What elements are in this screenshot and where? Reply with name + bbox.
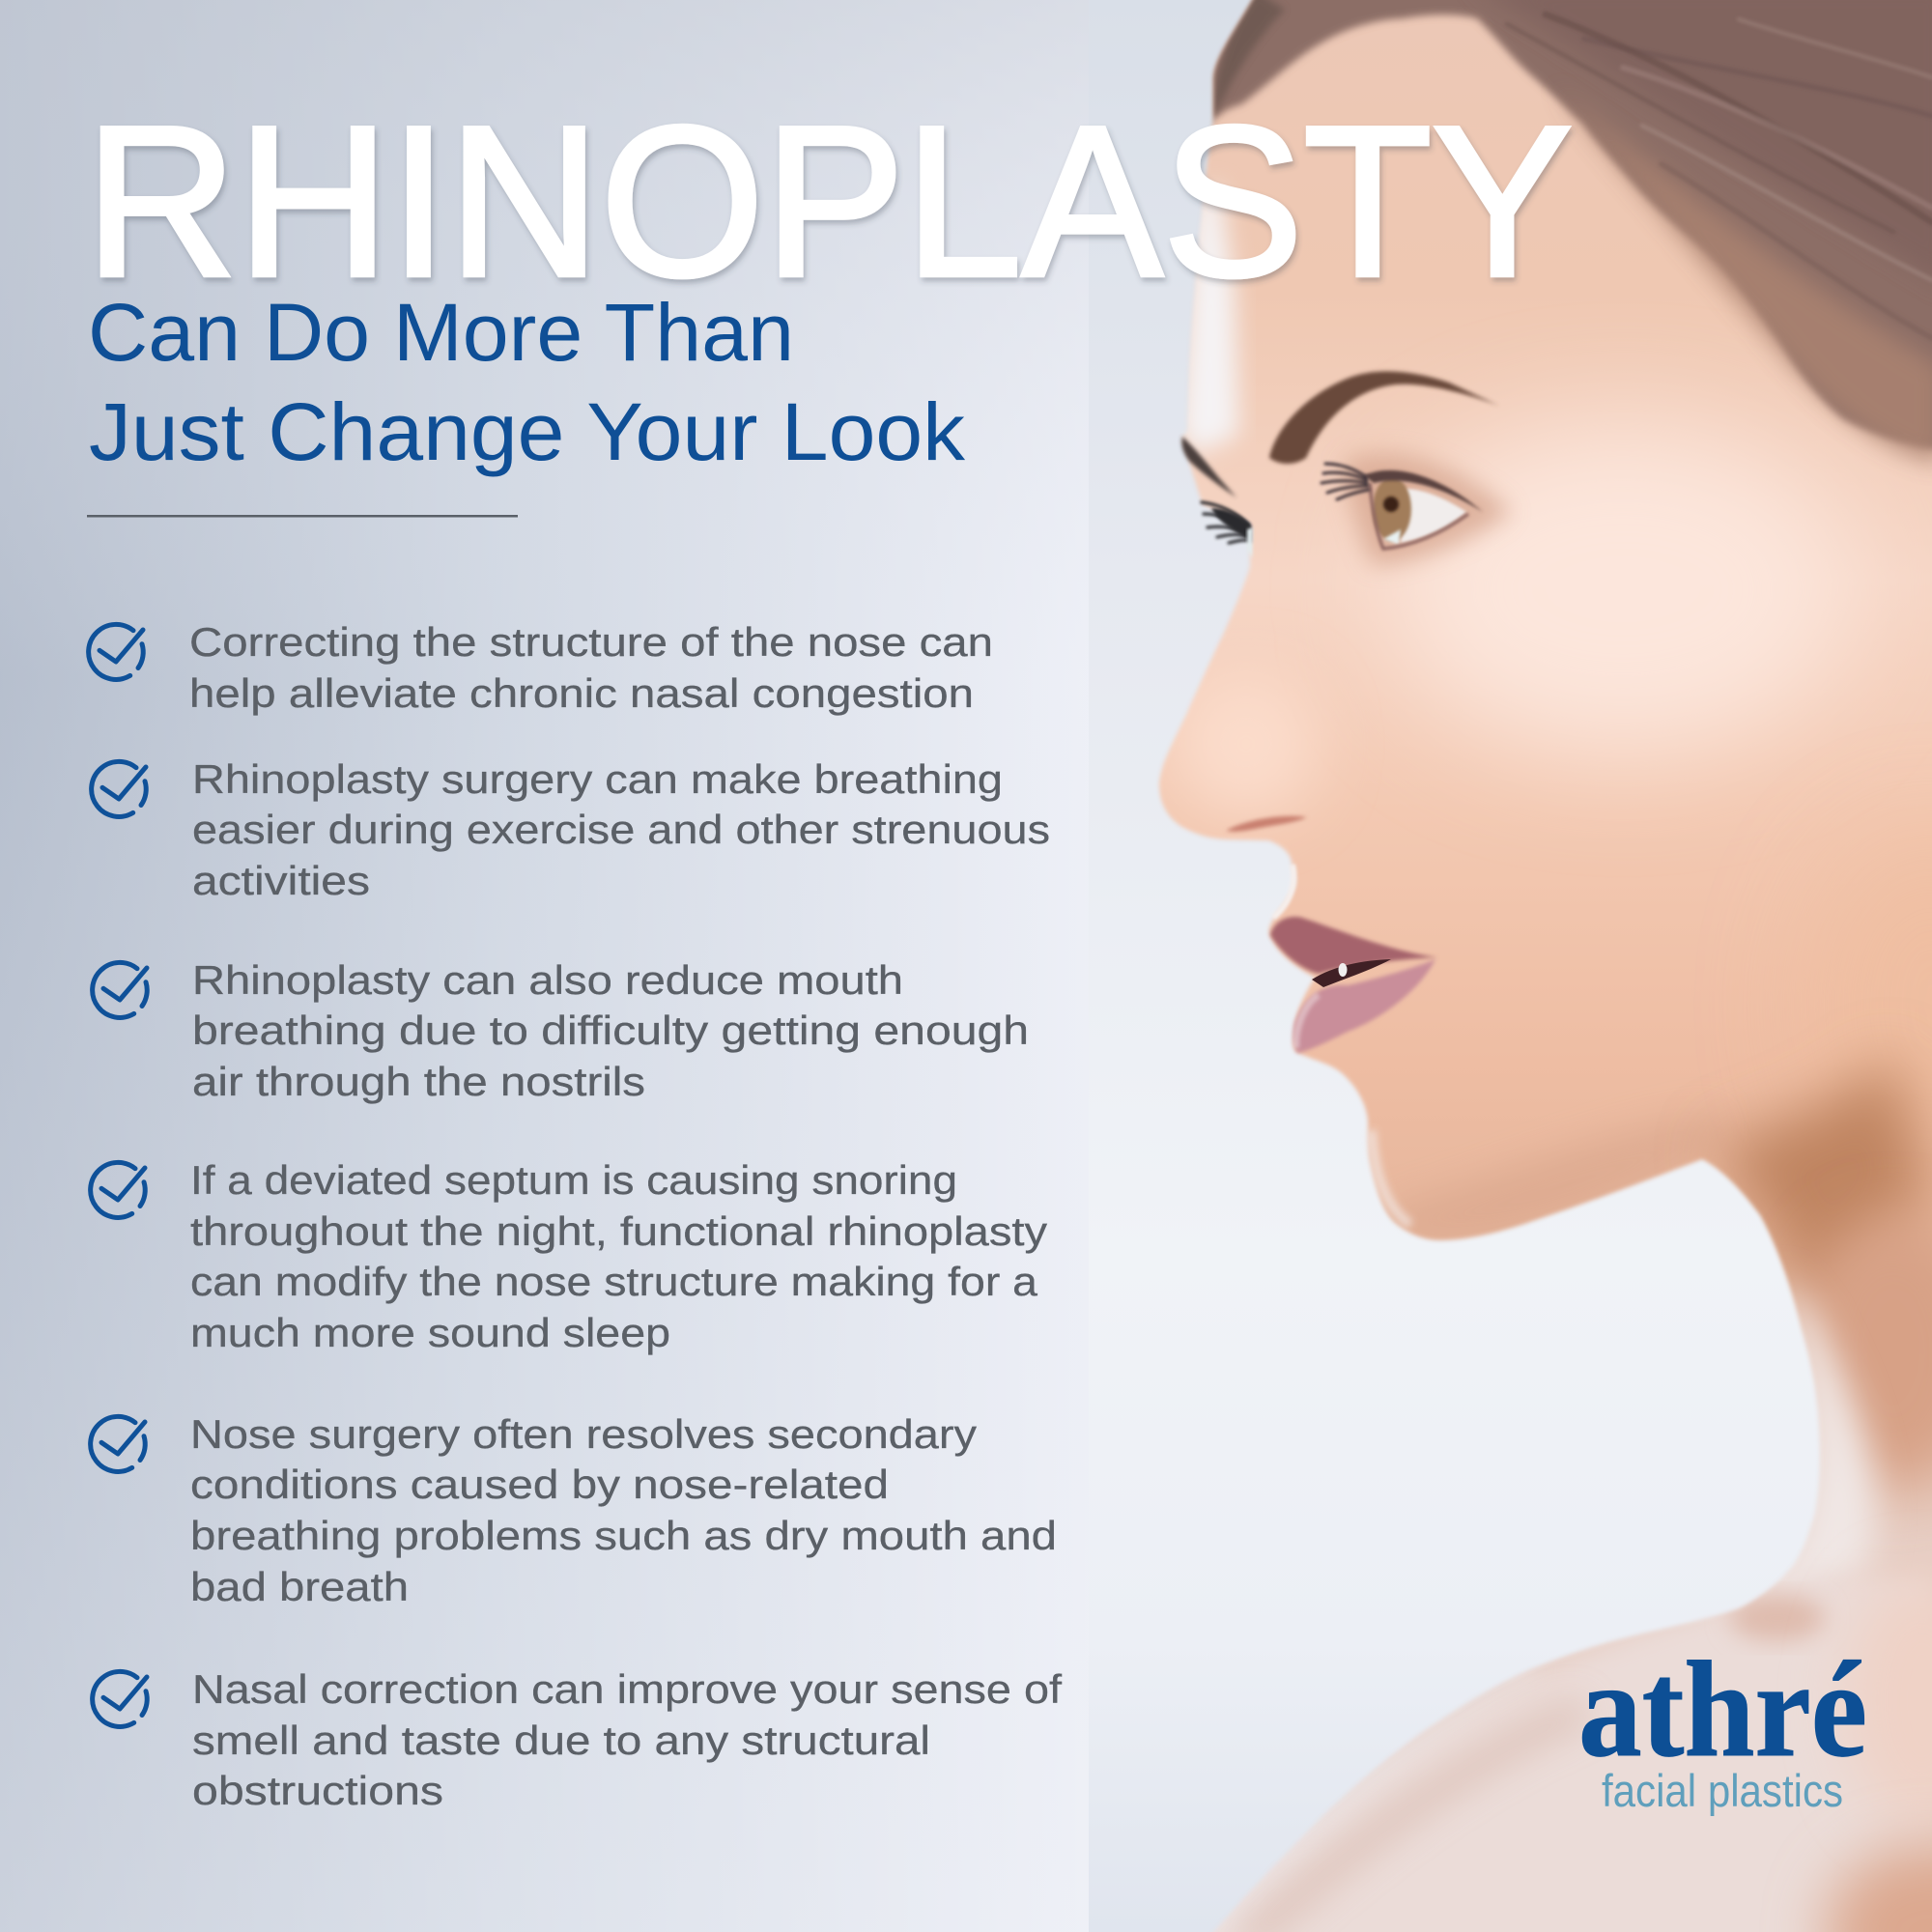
text: item 5: Nose surgery often resolves secondary bbox=[190, 1411, 977, 1457]
hair streaks bbox=[1507, 14, 1932, 338]
philtrum rim bbox=[1273, 865, 1293, 918]
shoulder edge fade bbox=[1302, 1674, 1528, 1841]
text: item 2: easier during exercise and other strenuous bbox=[192, 807, 1050, 852]
text: item 4: much more sound sleep bbox=[190, 1310, 670, 1355]
text: item 6: obstructions bbox=[192, 1768, 443, 1813]
text: item 2: activities bbox=[192, 858, 370, 903]
logo: athré facial plastics: facial plastics bbox=[1602, 1765, 1843, 1816]
jaw shade bbox=[1412, 1121, 1701, 1232]
forehead pale rim bbox=[1180, 184, 1238, 454]
upper lid and lower lid bbox=[1364, 470, 1483, 512]
neck pale rim bbox=[1775, 1273, 1893, 1589]
eyelid shading bbox=[1343, 453, 1512, 565]
far eyebrow and lashes bbox=[1181, 437, 1253, 558]
text: item 4: throughout the night, functional rhinoplasty bbox=[190, 1208, 1047, 1254]
icon: check circle bbox=[92, 761, 146, 816]
text: item 5: breathing problems such as dry mouth and bbox=[190, 1513, 1057, 1558]
item 5 bbox=[91, 1411, 1057, 1609]
checklist bbox=[89, 619, 1062, 1813]
right side warm bbox=[1882, 875, 1932, 945]
subtitle: Just Change Your Look bbox=[89, 386, 966, 477]
divider bbox=[87, 515, 518, 518]
item 6 bbox=[93, 1666, 1062, 1813]
item 2 bbox=[92, 756, 1050, 903]
text: item 3: Rhinoplasty can also reduce mouth bbox=[192, 957, 903, 1003]
text: item 2: Rhinoplasty surgery can make breathing bbox=[192, 756, 1003, 802]
text: item 6: Nasal correction can improve your sense of bbox=[192, 1666, 1062, 1712]
neck dark bbox=[1710, 1053, 1932, 1323]
item 3 bbox=[93, 957, 1029, 1104]
hair bbox=[1208, 0, 1932, 464]
eyebrow bbox=[1269, 371, 1499, 464]
chin rim bbox=[1372, 1130, 1410, 1225]
title: RHINOPLASTY bbox=[85, 82, 1573, 322]
cheek highlight bbox=[1391, 425, 1855, 753]
icon: check circle bbox=[91, 1162, 145, 1217]
nose highlight bbox=[1174, 671, 1319, 816]
text: item 6: smell and taste due to any structural bbox=[192, 1718, 930, 1763]
text: item 4: can modify the nose structure making for a bbox=[190, 1259, 1038, 1304]
item 1 bbox=[89, 619, 993, 716]
collarbone and shoulder bbox=[1355, 1585, 1893, 1839]
text: item 3: breathing due to difficulty getting enough bbox=[192, 1008, 1029, 1053]
icon: check circle bbox=[93, 962, 147, 1017]
text: item 5: bad breath bbox=[190, 1564, 409, 1609]
lips bbox=[1270, 917, 1437, 1053]
panel: left text panel background bbox=[0, 0, 1089, 1932]
subtitle: Can Do More Than bbox=[88, 287, 794, 378]
nostril bbox=[1226, 816, 1307, 832]
eye bbox=[1321, 453, 1512, 565]
text: item 3: air through the nostrils bbox=[192, 1059, 645, 1104]
photo: woman's face in profile bbox=[1150, 0, 1932, 1932]
text: item 1: help alleviate chronic nasal congestion bbox=[189, 670, 974, 716]
lashes bbox=[1321, 464, 1369, 499]
text: item 1: Correcting the structure of the nose can bbox=[189, 619, 993, 665]
icon: check circle bbox=[91, 1416, 145, 1471]
icon: check circle bbox=[93, 1671, 147, 1726]
text: item 4: If a deviated septum is causing snoring bbox=[190, 1157, 957, 1203]
subtitle bbox=[88, 287, 966, 477]
icon: check circle bbox=[89, 624, 143, 679]
item 4 bbox=[91, 1157, 1047, 1355]
text: item 5: conditions caused by nose-related bbox=[190, 1462, 889, 1507]
logo: athré facial plastics: athré bbox=[1578, 1633, 1867, 1785]
